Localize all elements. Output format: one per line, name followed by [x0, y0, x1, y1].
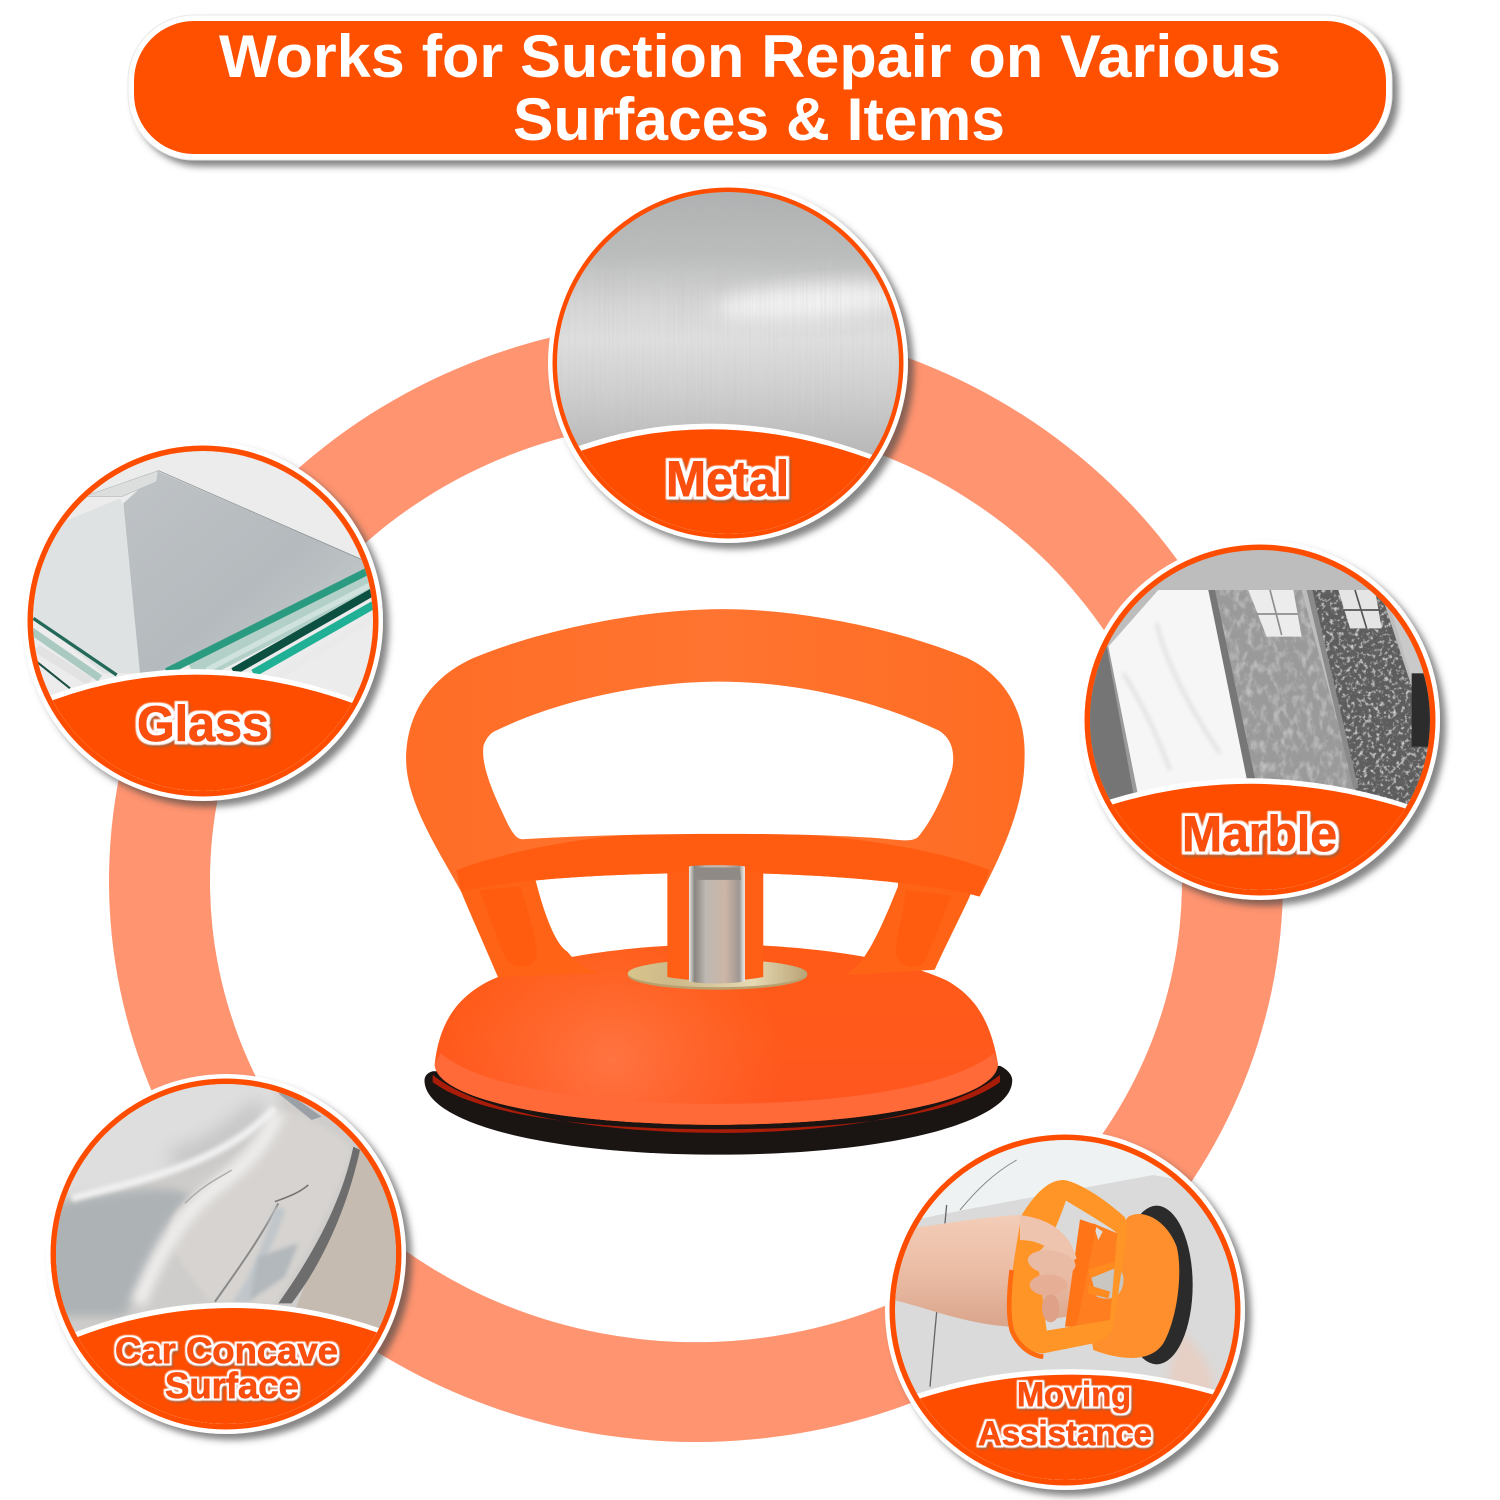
label: Moving Assistance: Assistance: [978, 1415, 1152, 1453]
panel: car concave surface: [38, 1070, 415, 1440]
panel: marble: [1080, 540, 1450, 910]
label: Moving Assistance: Moving: [1017, 1376, 1131, 1414]
title banner: Surfaces & Items: [513, 86, 1005, 153]
panel: metal: [540, 180, 920, 560]
label: Glass: Glass: [137, 696, 269, 752]
title banner: Works for Suction Repair on Various: [219, 23, 1281, 90]
label: Car Concave Surface: [115, 1330, 338, 1406]
title banner: [128, 15, 1392, 160]
label: Car Concave Surface: Surface: [165, 1365, 299, 1406]
label: Marble: Marble: [1182, 806, 1337, 862]
background ring: [109, 320, 1283, 1442]
label: Car Concave Surface: Car Concave: [115, 1330, 338, 1371]
panel: glass: [20, 440, 390, 810]
label: Metal: Metal: [666, 451, 789, 507]
suction cup dent puller: [406, 609, 1025, 1155]
panel: moving assistance: [880, 1130, 1250, 1500]
label: Moving Assistance: [978, 1376, 1152, 1453]
handle legs: [453, 868, 980, 977]
